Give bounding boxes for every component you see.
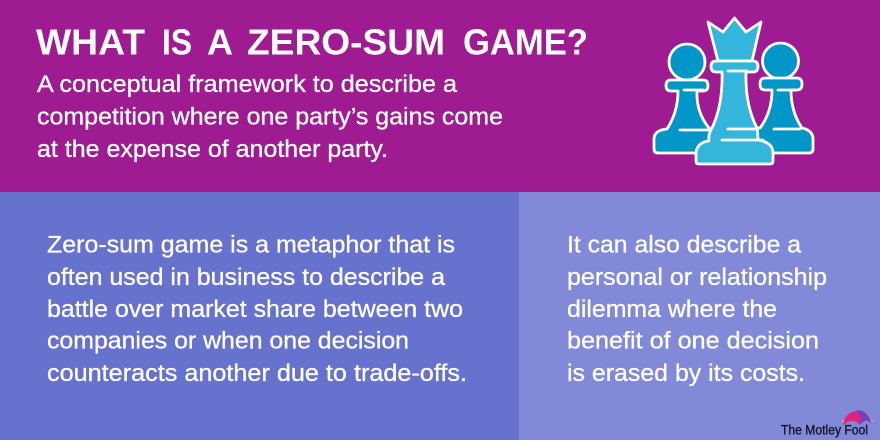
panel: header background — [0, 0, 880, 192]
title: A — [207, 22, 233, 62]
right body text block: benefit of one decision — [567, 328, 819, 354]
left body text block — [47, 232, 467, 387]
left body text block: companies or when one decision — [47, 328, 409, 354]
title: WHAT — [36, 22, 145, 62]
subtitle text block: competition where one party’s gains come — [37, 104, 503, 130]
icon: jester hat — [842, 410, 873, 425]
icon: chess pieces — [654, 18, 813, 164]
logo: The Motley Fool — [781, 410, 873, 438]
right body text block: is erased by its costs. — [567, 360, 805, 387]
panel: left body background — [0, 192, 519, 440]
panel: right body background — [519, 192, 880, 440]
right body text block: dilemma where the — [567, 296, 777, 323]
logo wordmark: The Motley Fool — [781, 422, 868, 438]
subtitle text block: at the expense of another party. — [37, 136, 388, 163]
right body text block: personal or relationship — [567, 264, 827, 291]
left body text block: counteracts another due to trade-offs. — [47, 360, 467, 387]
icon: left pawn — [654, 44, 716, 153]
icon: queen — [696, 18, 773, 164]
title — [36, 22, 588, 62]
title: GAME? — [463, 22, 588, 62]
title: ZERO-SUM — [247, 22, 445, 62]
title: IS — [162, 22, 192, 62]
right body text block: It can also describe a — [567, 232, 802, 258]
left body text block: battle over market share between two — [47, 296, 463, 323]
left body text block: often used in business to describe a — [47, 264, 446, 291]
subtitle text block — [37, 71, 503, 163]
icon: right pawn — [745, 43, 813, 153]
subtitle text block: A conceptual framework to describe a — [37, 71, 457, 98]
right body text block — [567, 232, 827, 387]
left body text block: Zero-sum game is a metaphor that is — [47, 232, 455, 258]
